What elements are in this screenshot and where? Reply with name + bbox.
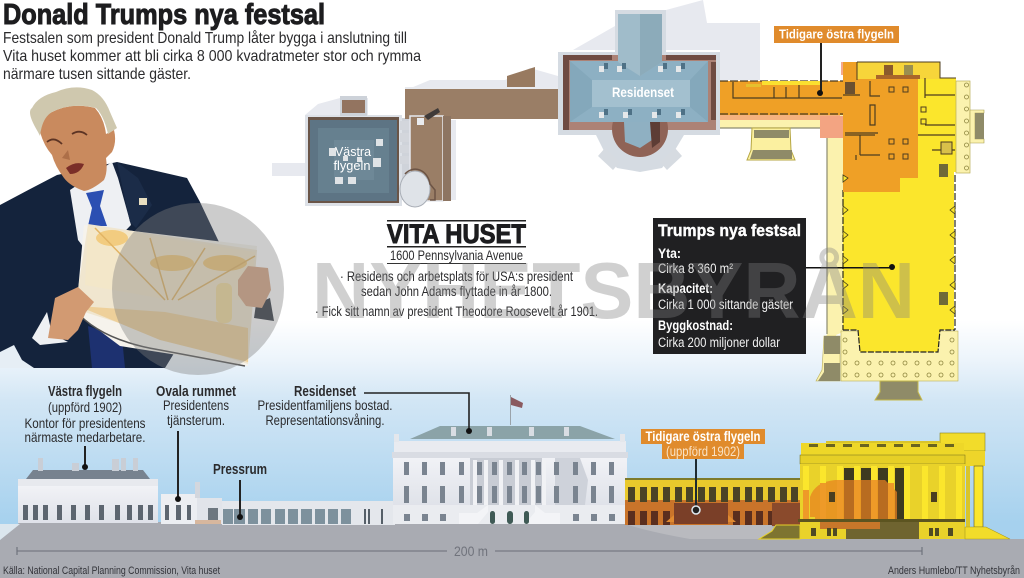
plan: cream terrace east	[956, 81, 984, 173]
callout: Tidigare östra flygeln on elevation: (uppförd 1902)	[666, 444, 740, 459]
scale bar: 200 m: 200 m	[454, 543, 488, 559]
label: Residenset on plan: Residenset	[612, 84, 674, 100]
callout: Tidigare östra flygeln on elevation	[641, 429, 765, 514]
plan: orange overlap with former east wing	[843, 62, 918, 192]
callout: Residenset: Presidentfamiljens bostad.	[258, 397, 392, 413]
intro text: närmare tusen sittande gäster.	[3, 66, 191, 83]
callout: Ovala rummet: Presidentens	[163, 397, 229, 413]
callout: Ovala rummet: tjänsterum.	[167, 412, 225, 428]
elevation: former east wing	[625, 478, 800, 526]
plan shadows	[272, 0, 760, 200]
callout: Pressrum: Pressrum	[213, 462, 267, 478]
callout: Västra flygeln: Västra flygeln	[48, 384, 122, 400]
panel: floor plan of the White House complex	[272, 0, 984, 400]
callout: Residenset: Residenset	[294, 384, 356, 400]
label: Västra flygeln: flygeln	[334, 158, 370, 173]
plan: connecting colonnade and oval office	[400, 67, 559, 207]
intro text: Festsalen som president Donald Trump låter bygga i anslutning till	[3, 29, 407, 47]
callout: Pressrum	[213, 462, 267, 520]
plan: portico columns	[843, 338, 954, 377]
label: Västra flygeln	[334, 144, 372, 173]
callout: Residenset: Representationsvåning.	[266, 412, 384, 428]
callout: Västra flygeln: Kontor för presidentens	[24, 415, 146, 431]
background sky gradient	[0, 320, 1024, 545]
panel: Trumps nya festsal fact box: Byggkostnad:	[658, 318, 733, 333]
intro text	[3, 29, 421, 83]
elevation: Residenset, the White House	[392, 395, 628, 524]
shirt and tie	[70, 162, 131, 262]
watermark	[112, 203, 915, 375]
elevation: Ovala rummet and colonnade	[161, 482, 395, 525]
plan: new ballroom, Trumps nya festsal	[816, 62, 984, 400]
label: Västra flygeln: Västra	[335, 144, 372, 159]
bullet text: · Residens och arbetsplats för USA:s president	[340, 268, 573, 284]
suit	[0, 162, 230, 368]
plan: cream portico south	[816, 331, 958, 400]
heading: VITA HUSET: VITA HUSET	[387, 219, 526, 249]
head	[40, 106, 115, 191]
ground and distance base	[0, 522, 1024, 578]
flag	[510, 395, 523, 425]
callout: Västra flygeln	[24, 384, 146, 470]
photo: Trump holding a ballroom illustration	[0, 87, 274, 368]
panel: Trumps nya festsal fact box: Cirka 200 miljoner dollar	[658, 335, 780, 350]
bullet text	[315, 268, 598, 319]
elevation: Västra flygeln	[18, 458, 158, 523]
panel: Trumps nya festsal fact box: Trumps nya festsal	[658, 221, 801, 240]
plan: west wing	[305, 96, 402, 206]
elevation: new ballroom	[759, 433, 1010, 539]
callout: Residenset	[258, 384, 472, 434]
callout: Västra flygeln: närmaste medarbetare.	[24, 429, 146, 445]
bullet text: sedan John Adams flyttade in år 1800.	[361, 283, 552, 299]
scale bar: 200 m	[17, 543, 922, 559]
watermark: NYHETSBYRÅN	[312, 246, 915, 335]
panel: Trumps nya festsal fact box	[653, 218, 895, 354]
plan: former east wing corridor and cream terraces	[720, 62, 858, 346]
callout: Tidigare östra flygeln on plan	[774, 26, 899, 96]
panel: Trumps nya festsal fact box: Cirka 8 360 m²	[658, 261, 733, 276]
callout: Västra flygeln: (uppförd 1902)	[48, 399, 122, 415]
callout: Ovala rummet: Ovala rummet	[156, 384, 236, 400]
hands and cuff	[32, 312, 68, 345]
callout: Tidigare östra flygeln on plan: Tidigare östra flygeln	[779, 26, 894, 42]
panel: Trumps nya festsal fact box: Yta:	[658, 246, 681, 261]
callout: Ovala rummet	[156, 384, 236, 502]
address: 1600 Pennsylvania Avenue	[390, 247, 523, 263]
panel: Trumps nya festsal fact box: Kapacitet:	[658, 281, 713, 296]
bullet text: · Fick sitt namn av president Theodore Roosevelt år 1901.	[315, 303, 598, 319]
source: Källa: National Capital Planning Commission, Vita huset	[3, 565, 220, 577]
plan: garden stairs	[747, 128, 795, 160]
callout: Tidigare östra flygeln on elevation: Tidigare östra flygeln	[646, 429, 760, 444]
plan: Residenset	[558, 10, 720, 172]
intro text: Vita huset kommer att bli cirka 8 000 kvadratmeter stor och rymma	[3, 48, 421, 65]
panel: VITA HUSET facts	[315, 219, 598, 319]
illustration sheet	[75, 224, 257, 366]
panel: Trumps nya festsal fact box: Cirka 1 000 sittande gäster	[658, 297, 793, 312]
